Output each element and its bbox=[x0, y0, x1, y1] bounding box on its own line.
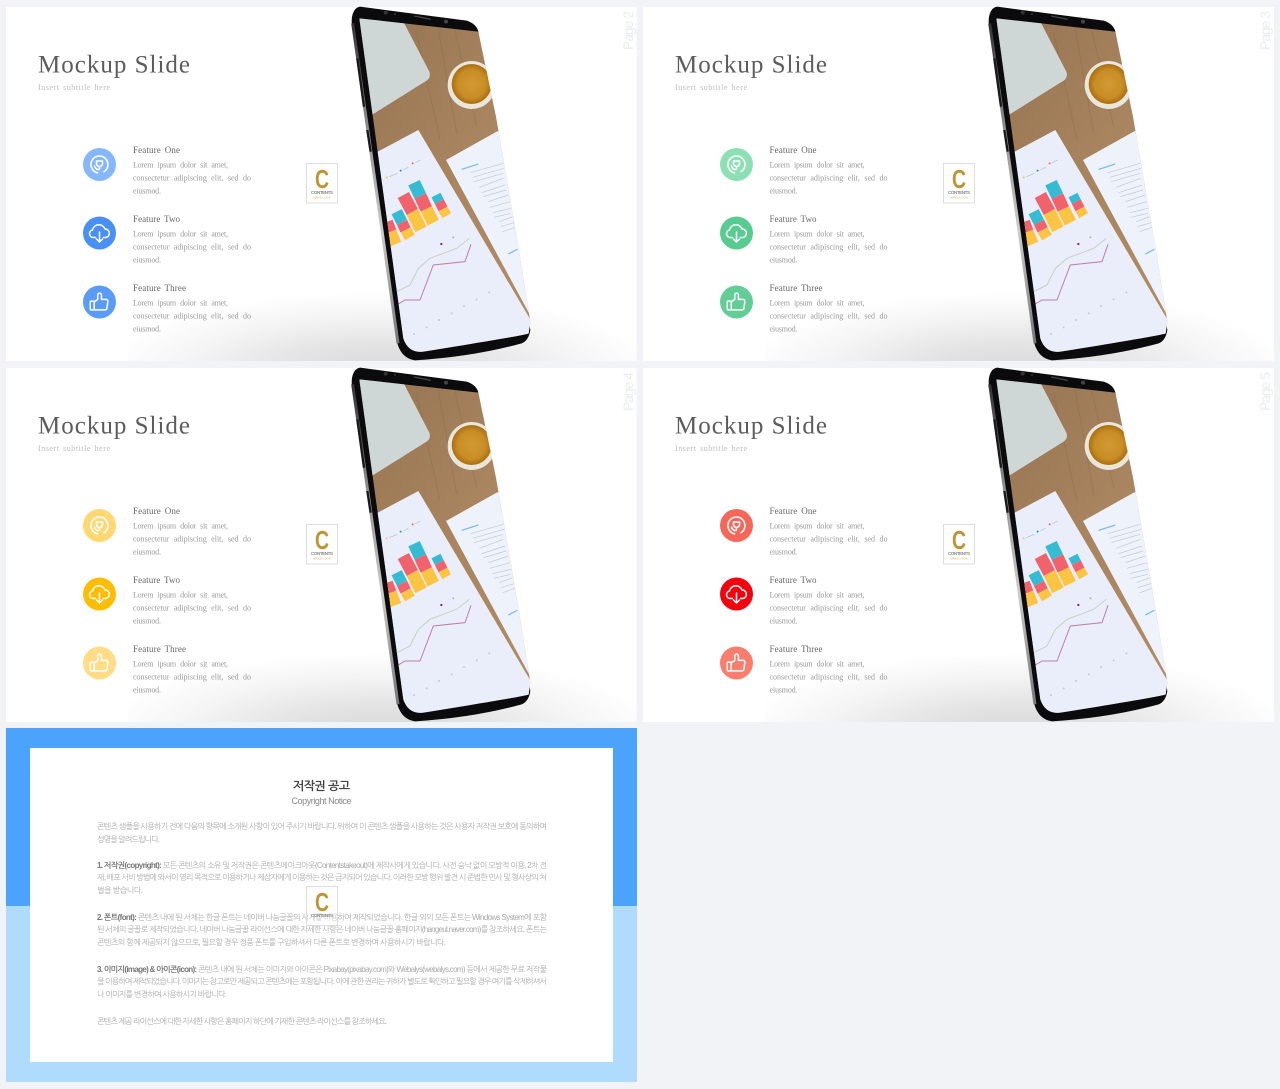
feature three text: eiusmod. bbox=[133, 686, 161, 694]
image and icon clause: 을 이용하여 제작되었습니다. 이미지는 참고로만 제공되고 콘텐츠에는 포함됩니다. 이에 관한 권리는 귀하가 별도로 확인하고 필요할 경우 여기를 삭제하셔서 bbox=[97, 977, 547, 986]
feature three text: Feature Three bbox=[770, 283, 822, 293]
logo badge bbox=[306, 164, 338, 203]
feature three text: Feature Three bbox=[770, 644, 822, 654]
feature two icon: cloud download bbox=[83, 578, 116, 610]
image and icon clause bbox=[97, 965, 547, 999]
feature two text: Lorem ipsum dolor sit amet, bbox=[133, 590, 228, 600]
feature one text: consectetur adipiscing elit, sed do bbox=[770, 534, 888, 544]
logo badge: MAKE LOOK bbox=[313, 196, 331, 200]
title: Mockup Slide bbox=[675, 412, 827, 440]
feature three text: Feature Three bbox=[133, 644, 186, 654]
feature one text: eiusmod. bbox=[770, 186, 798, 196]
feature two text bbox=[133, 214, 251, 264]
logo badge: C bbox=[952, 525, 966, 555]
feature three text bbox=[770, 283, 888, 334]
feature one text: Lorem ipsum dolor sit amet, bbox=[770, 160, 864, 170]
logo badge: C bbox=[315, 525, 329, 555]
copyright clause bbox=[97, 861, 547, 895]
subtitle: Insert subtitle here bbox=[38, 444, 110, 453]
feature two text: Feature Two bbox=[770, 214, 817, 224]
title: Mockup Slide bbox=[675, 52, 827, 78]
feature three icon: thumbs up bbox=[83, 286, 116, 318]
slide panel: green Mockup Slide, page 3 bbox=[643, 0, 1274, 367]
phone mockup bbox=[340, 361, 573, 728]
page number: Page 2 bbox=[620, 11, 636, 50]
feature two text bbox=[770, 575, 888, 626]
feature two text: Feature Two bbox=[770, 575, 817, 585]
feature three text: consectetur adipiscing elit, sed do bbox=[133, 312, 251, 320]
subtitle: Insert subtitle here bbox=[675, 83, 747, 92]
intro paragraph bbox=[97, 822, 547, 844]
copyright clause: 벌을 받습니다. bbox=[97, 886, 143, 895]
feature three text: eiusmod. bbox=[770, 324, 798, 334]
feature one text: eiusmod. bbox=[133, 548, 161, 556]
font clause: 된 서체의 글꼴로 제작되었습니다. 네이버 나눔글꼴 라이선스에 대한 자세한 사항은 네이버 나눔글꼴 홈페이지(hangeul.naver.com)를 참조하세요. 폰트는 bbox=[97, 925, 547, 934]
copyright clause: 재, 배포 서비 방법에 와서이 영리 목적으로 이용하거나 제삼자에게 이용하는 것은 금지되어 있습니다. 이러한 모방 행위 발견 시 준법한 민사 및 형사상의 처 bbox=[97, 873, 547, 882]
logo badge: CONTENTS bbox=[311, 551, 333, 556]
feature one icon: plug bbox=[83, 148, 116, 181]
feature two text: Lorem ipsum dolor sit amet, bbox=[770, 230, 864, 238]
feature two icon: cloud download bbox=[720, 578, 753, 610]
logo badge bbox=[944, 164, 974, 203]
feature three text bbox=[133, 644, 251, 694]
logo badge: MAKE LOOK bbox=[313, 556, 331, 560]
feature two text: eiusmod. bbox=[133, 256, 161, 264]
feature three icon: thumbs up bbox=[83, 646, 116, 680]
license note: 콘텐츠 제공 라이선스에 대한 자세한 사항은 홈페이지 하단에 기재한 콘텐츠 라이선스를 참조하세요. bbox=[97, 1017, 387, 1026]
feature one text: Lorem ipsum dolor sit amet, bbox=[133, 160, 228, 170]
intro paragraph: 콘텐츠 샘플을 사용하기 전에 다음의 항목에 소개된 사항이 있어 주시기 바랍니다. 위하여 이 콘텐츠 샘플을 사용하는 것은 사용자 저작권 보호에 동의하여 bbox=[97, 822, 547, 831]
page number: Page 5 bbox=[1257, 372, 1273, 411]
notice heading: 저작권 공고 bbox=[293, 779, 351, 793]
logo badge: CONTENTS bbox=[311, 190, 333, 195]
feature three icon: thumbs up bbox=[720, 646, 753, 680]
subtitle: Insert subtitle here bbox=[38, 83, 110, 92]
feature three text bbox=[133, 283, 251, 334]
logo badge: C bbox=[952, 164, 966, 194]
feature two text: eiusmod. bbox=[133, 616, 161, 626]
feature one text: Lorem ipsum dolor sit amet, bbox=[133, 522, 228, 530]
phone mockup bbox=[340, 0, 573, 367]
feature one text: eiusmod. bbox=[770, 548, 798, 556]
feature three text bbox=[770, 644, 888, 694]
feature one text: Feature One bbox=[133, 145, 180, 155]
slide panel: yellow Mockup Slide, page 4 bbox=[6, 361, 636, 728]
feature one text: Feature One bbox=[133, 506, 180, 516]
logo badge: CONTENTS bbox=[948, 551, 970, 556]
feature one text: Lorem ipsum dolor sit amet, bbox=[770, 522, 864, 530]
feature two text: consectetur adipiscing elit, sed do bbox=[133, 242, 251, 252]
title: Mockup Slide bbox=[38, 412, 190, 440]
notice subheading: Copyright Notice bbox=[292, 796, 352, 806]
feature one text: eiusmod. bbox=[133, 186, 161, 196]
logo badge: MAKE LOOK bbox=[950, 196, 968, 200]
title: Mockup Slide bbox=[38, 52, 190, 78]
phone mockup bbox=[977, 361, 1210, 728]
feature two text: consectetur adipiscing elit, sed do bbox=[770, 242, 888, 252]
feature two text bbox=[133, 575, 251, 626]
logo badge: CONTENTS bbox=[948, 190, 970, 195]
page number: Page 3 bbox=[1257, 11, 1273, 50]
feature one icon: plug bbox=[83, 509, 116, 542]
logo badge bbox=[944, 524, 974, 564]
feature one icon: plug bbox=[720, 148, 753, 181]
intro paragraph: 성명을 알려드립니다. bbox=[97, 835, 160, 844]
feature three text: Lorem ipsum dolor sit amet, bbox=[133, 660, 228, 668]
feature three text: Lorem ipsum dolor sit amet, bbox=[770, 660, 864, 668]
feature two icon: cloud download bbox=[83, 216, 116, 250]
feature two text: Feature Two bbox=[133, 214, 180, 224]
feature one text bbox=[133, 145, 251, 196]
feature two icon: cloud download bbox=[720, 216, 753, 250]
feature two text: consectetur adipiscing elit, sed do bbox=[133, 604, 251, 612]
feature three text: consectetur adipiscing elit, sed do bbox=[133, 672, 251, 682]
logo badge: CONTENTS bbox=[311, 913, 333, 918]
feature two text: eiusmod. bbox=[770, 256, 798, 264]
logo badge bbox=[306, 886, 338, 926]
feature one text: consectetur adipiscing elit, sed do bbox=[133, 174, 251, 182]
page number: Page 4 bbox=[620, 372, 636, 411]
feature one text: consectetur adipiscing elit, sed do bbox=[133, 534, 251, 544]
feature two text bbox=[770, 214, 888, 264]
feature three text: consectetur adipiscing elit, sed do bbox=[770, 672, 888, 682]
feature three text: Lorem ipsum dolor sit amet, bbox=[770, 298, 864, 308]
phone mockup bbox=[977, 0, 1210, 367]
feature two text: Lorem ipsum dolor sit amet, bbox=[770, 590, 864, 600]
feature one icon: plug bbox=[720, 509, 753, 542]
logo badge: MAKE LOOK bbox=[950, 556, 968, 560]
feature three text: consectetur adipiscing elit, sed do bbox=[770, 312, 888, 320]
feature one text bbox=[133, 506, 251, 556]
feature two text: Feature Two bbox=[133, 575, 180, 585]
image and icon clause: 3. 이미지(image) & 아이콘(icon): 콘텐츠 내에 된 서체는 이미지와 아이콘은 Pixabay(pixabay.com)와 Webalys(webalys.com) 등에서 제공한 무료 저작물 bbox=[97, 965, 547, 974]
feature three text: Feature Three bbox=[133, 283, 186, 293]
feature one text: Feature One bbox=[770, 145, 816, 155]
feature two text: consectetur adipiscing elit, sed do bbox=[770, 604, 888, 612]
feature one text: Feature One bbox=[770, 506, 816, 516]
font clause: 2. 폰트(font): 콘텐츠 내에 된 서체는 한글 폰트는 네이버 나눔글꼴의 서체를 이용하여 제작되었습니다. 한글 외의 모든 폰트는 Windows System에 포함 bbox=[97, 913, 547, 922]
feature three text: eiusmod. bbox=[133, 324, 161, 334]
image and icon clause: 나 이미지를 변경하여 사용하시기 바랍니다. bbox=[97, 990, 227, 999]
slide panel: blue Mockup Slide, page 2 bbox=[6, 0, 636, 367]
logo badge bbox=[306, 524, 338, 564]
feature three icon: thumbs up bbox=[720, 286, 753, 318]
feature one text: consectetur adipiscing elit, sed do bbox=[770, 174, 888, 182]
feature three text: Lorem ipsum dolor sit amet, bbox=[133, 298, 228, 308]
feature two text: Lorem ipsum dolor sit amet, bbox=[133, 230, 228, 238]
copyright clause: 1. 저작권(copyright): 모든 콘텐츠의 소유 및 저작권은 콘텐츠메이크아웃(Contentstakeout)에 제작사에게 있습니다. 사전 승낙 없이 모방적 이용, 2차 전 bbox=[97, 861, 547, 870]
logo badge: C bbox=[315, 887, 329, 917]
slide panel: red Mockup Slide, page 5 bbox=[643, 361, 1274, 728]
slide panel: copyright notice bbox=[6, 728, 637, 1082]
font clause: 콘텐츠의 함께 제공되지 않으므로, 필요할 경우 정품 폰트를 구입하셔서 다른 폰트로 변경하여 사용하시기 바랍니다. bbox=[97, 938, 446, 947]
feature three text: eiusmod. bbox=[770, 686, 798, 694]
subtitle: Insert subtitle here bbox=[675, 444, 747, 453]
logo badge: C bbox=[315, 164, 329, 194]
font clause bbox=[97, 913, 547, 947]
feature one text bbox=[770, 145, 888, 196]
feature one text bbox=[770, 506, 888, 556]
feature two text: eiusmod. bbox=[770, 616, 798, 626]
